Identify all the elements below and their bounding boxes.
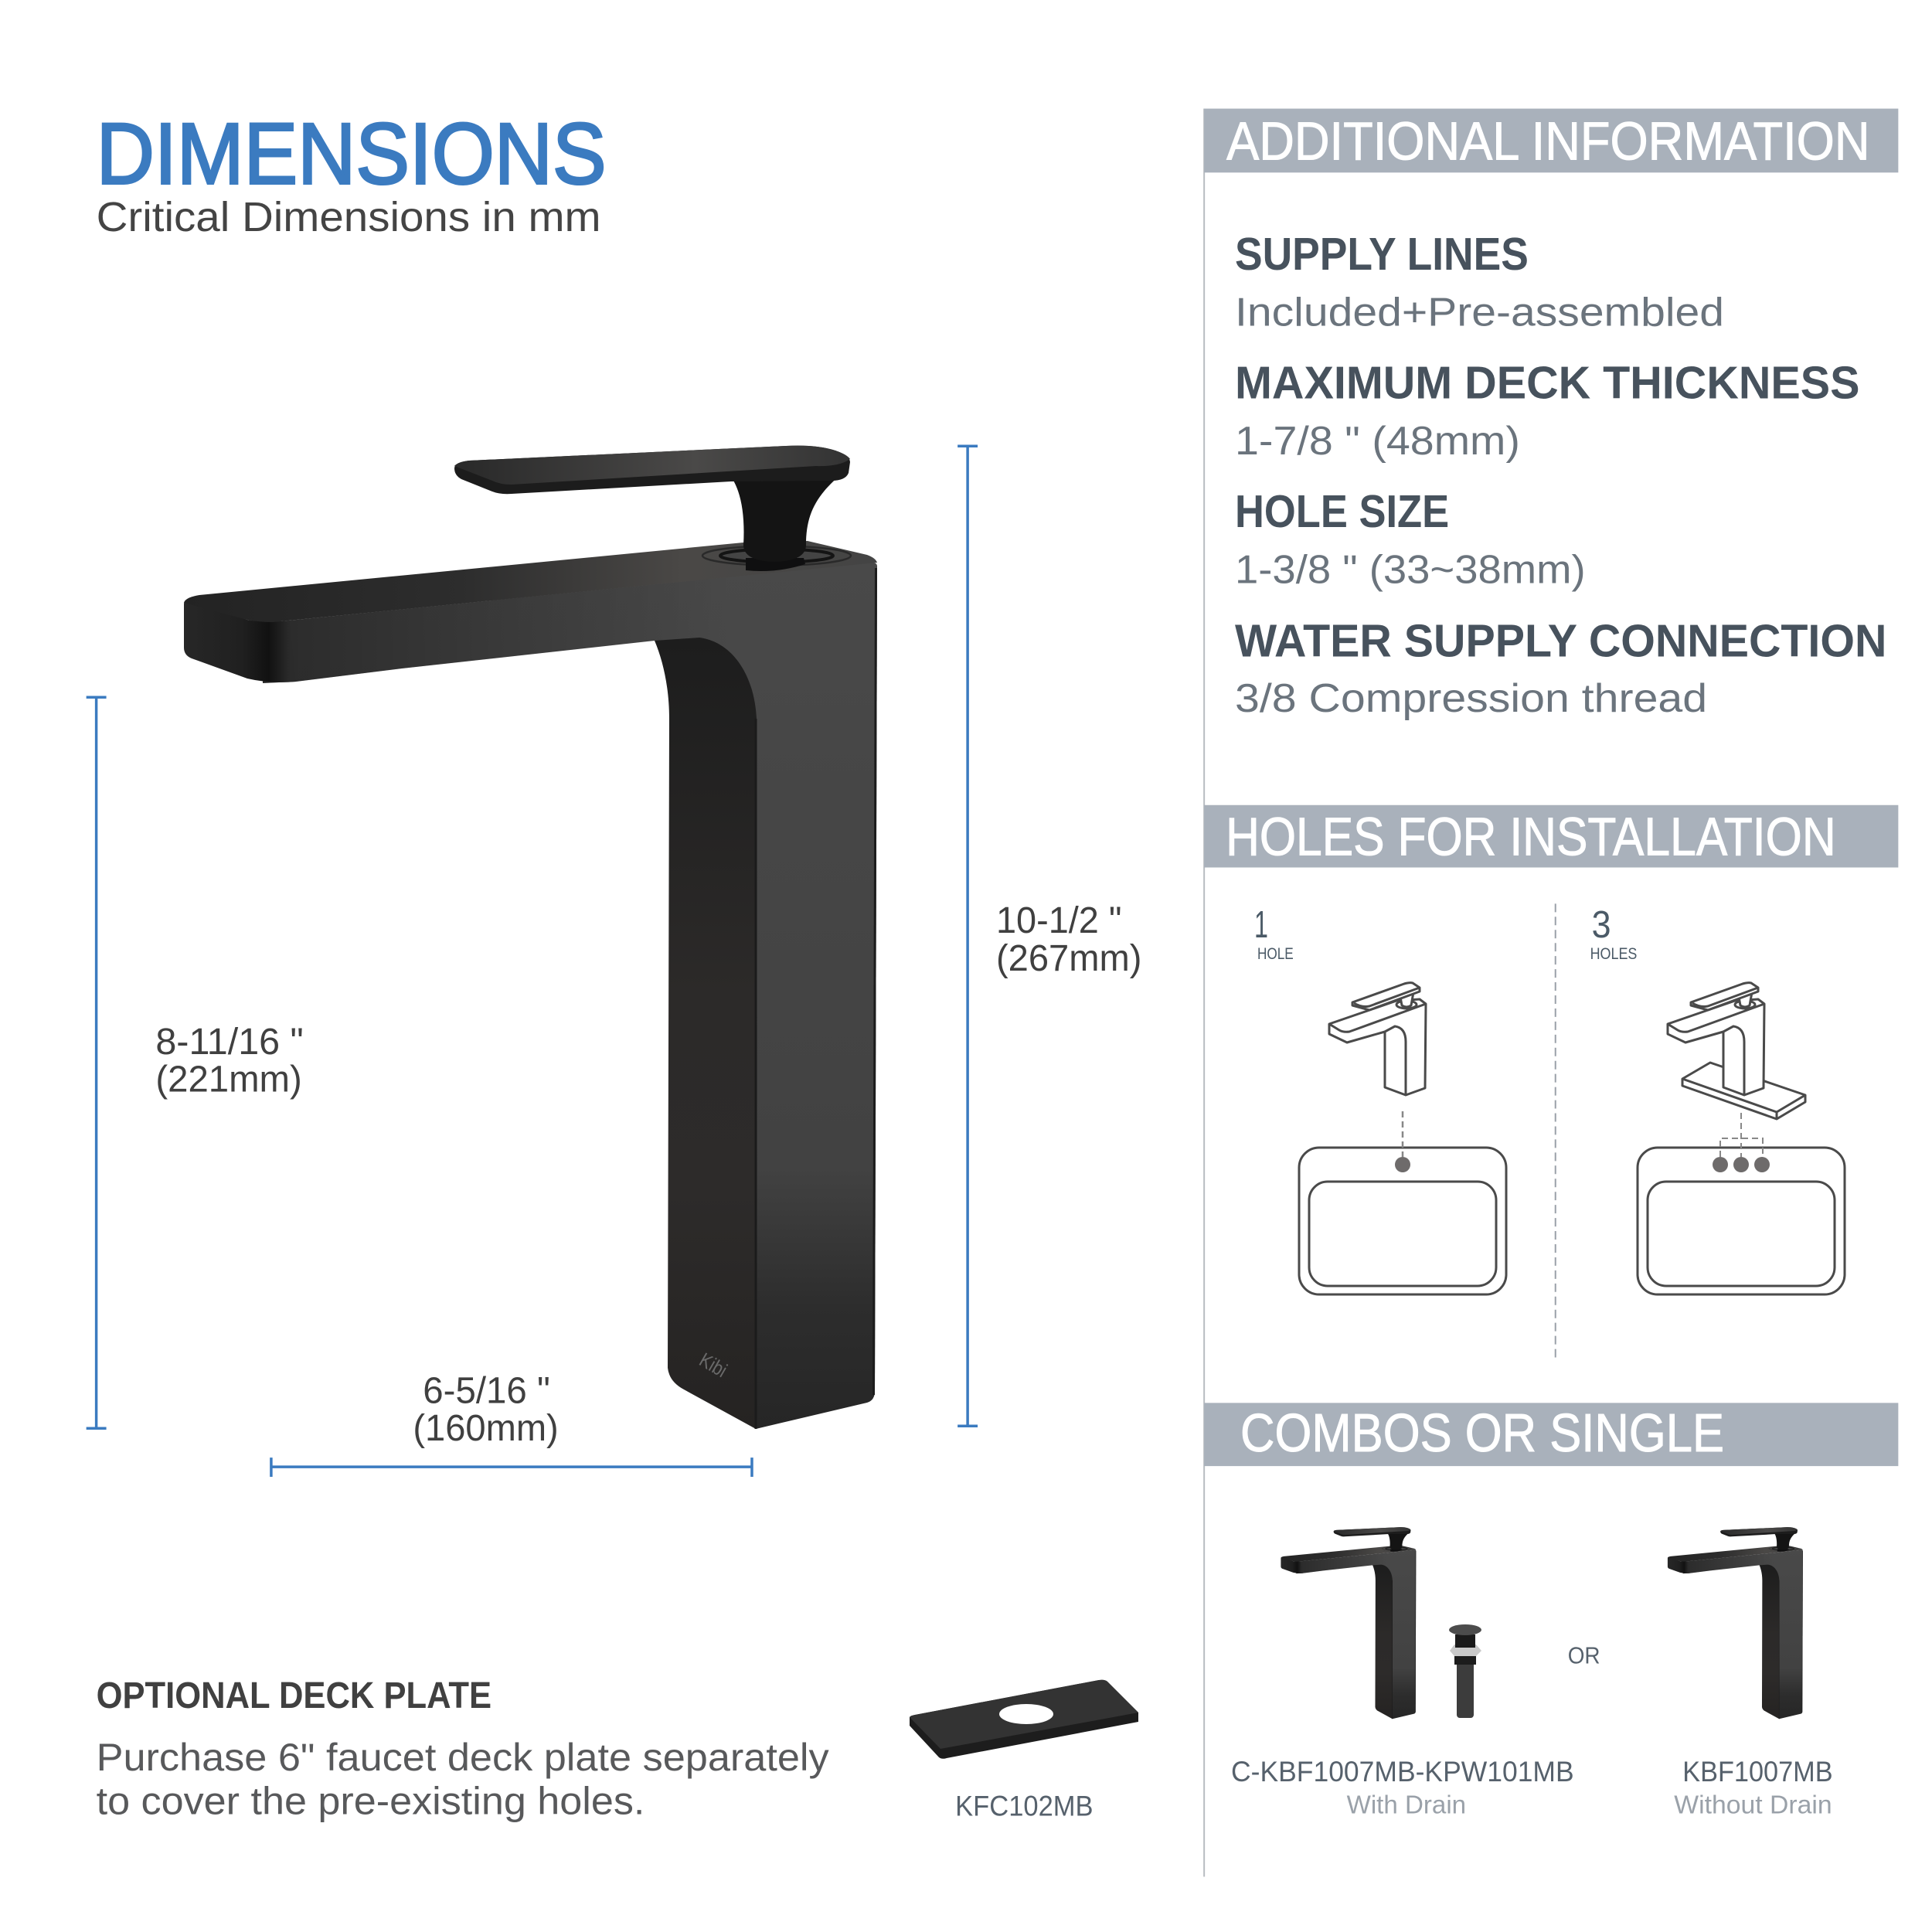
dimension line: total height [957, 446, 978, 1426]
optional deck plate text [97, 1675, 829, 1823]
band: combos or single: COMBOS OR SINGLE [1240, 1403, 1724, 1463]
spec: hole size [1235, 485, 1586, 592]
faucet logo: Kibi [696, 1348, 731, 1382]
dimension label: spout height: 8-11/16 " [155, 1022, 304, 1063]
spec: water supply connection: 3/8 Compression thread [1235, 675, 1707, 720]
spec: maximum deck thickness: MAXIMUM DECK THICKNESS [1235, 356, 1860, 408]
spec: supply lines: Included+Pre-assembled [1235, 290, 1724, 335]
single label [1674, 1756, 1833, 1819]
diagram: one hole faucet [1329, 983, 1426, 1095]
label: 1 hole [1254, 904, 1294, 963]
spec: maximum deck thickness: 1-7/8 " (48mm) [1235, 418, 1520, 463]
diagram: three hole faucet [1668, 983, 1764, 1095]
dimension line: spout height [87, 697, 107, 1428]
diagram: three hole deck plate [1682, 1063, 1805, 1119]
optional deck plate text: Purchase 6" faucet deck plate separately [97, 1736, 829, 1779]
label: 3 holes: 3 [1592, 904, 1611, 946]
subtitle: Critical Dimensions in mm [97, 194, 601, 240]
combo faucet photo [1281, 1527, 1416, 1719]
single label: Without Drain [1674, 1791, 1832, 1819]
main faucet photo [184, 446, 877, 1429]
divider between hole options [1555, 903, 1556, 1360]
or label: OR [1568, 1641, 1600, 1668]
label: 1 hole: 1 [1254, 904, 1268, 946]
dimension label: reach: 6-5/16 " [423, 1370, 550, 1411]
optional deck plate text: to cover the pre-existing holes. [97, 1780, 645, 1823]
spec: supply lines [1235, 228, 1724, 335]
spec: hole size: HOLE SIZE [1235, 485, 1449, 537]
dimension label: reach: (160mm) [413, 1408, 559, 1449]
dimension label: spout height [155, 1022, 304, 1100]
deck plate model number: KFC102MB [955, 1791, 1094, 1822]
dimension label: reach [413, 1370, 559, 1449]
optional deck plate text: OPTIONAL DECK PLATE [97, 1675, 492, 1716]
spec: water supply connection: WATER SUPPLY CONNECTION [1235, 614, 1886, 666]
spec: maximum deck thickness [1235, 356, 1860, 463]
spec: supply lines: SUPPLY LINES [1235, 228, 1529, 280]
dimension label: total height: 10-1/2 " [996, 900, 1121, 941]
label: 3 holes: HOLES [1590, 945, 1637, 963]
label: 3 holes [1590, 904, 1637, 963]
drain photo [1449, 1624, 1481, 1718]
single label: KBF1007MB [1682, 1756, 1833, 1787]
dimension label: total height: (267mm) [996, 938, 1141, 979]
deck plate photo [910, 1680, 1138, 1759]
single faucet photo [1668, 1527, 1803, 1719]
combo label: With Drain [1347, 1791, 1466, 1819]
band: holes for installation: HOLES FOR INSTALLATION [1226, 807, 1836, 867]
combo label: C-KBF1007MB-KPW101MB [1231, 1756, 1574, 1787]
column divider [1203, 109, 1205, 1876]
band: additional information: ADDITIONAL INFORMATION [1226, 111, 1869, 171]
dimension label: spout height: (221mm) [155, 1060, 302, 1100]
combo label [1231, 1756, 1574, 1819]
label: 1 hole: HOLE [1257, 945, 1294, 963]
spec: water supply connection [1235, 614, 1886, 720]
spec: hole size: 1-3/8 " (33~38mm) [1235, 547, 1586, 592]
dimension line: reach [271, 1458, 752, 1477]
diagram: three hole sink [1638, 1113, 1845, 1294]
dimension label: total height [996, 900, 1141, 979]
title: DIMENSIONS [97, 104, 607, 202]
diagram: one hole sink [1299, 1111, 1506, 1294]
